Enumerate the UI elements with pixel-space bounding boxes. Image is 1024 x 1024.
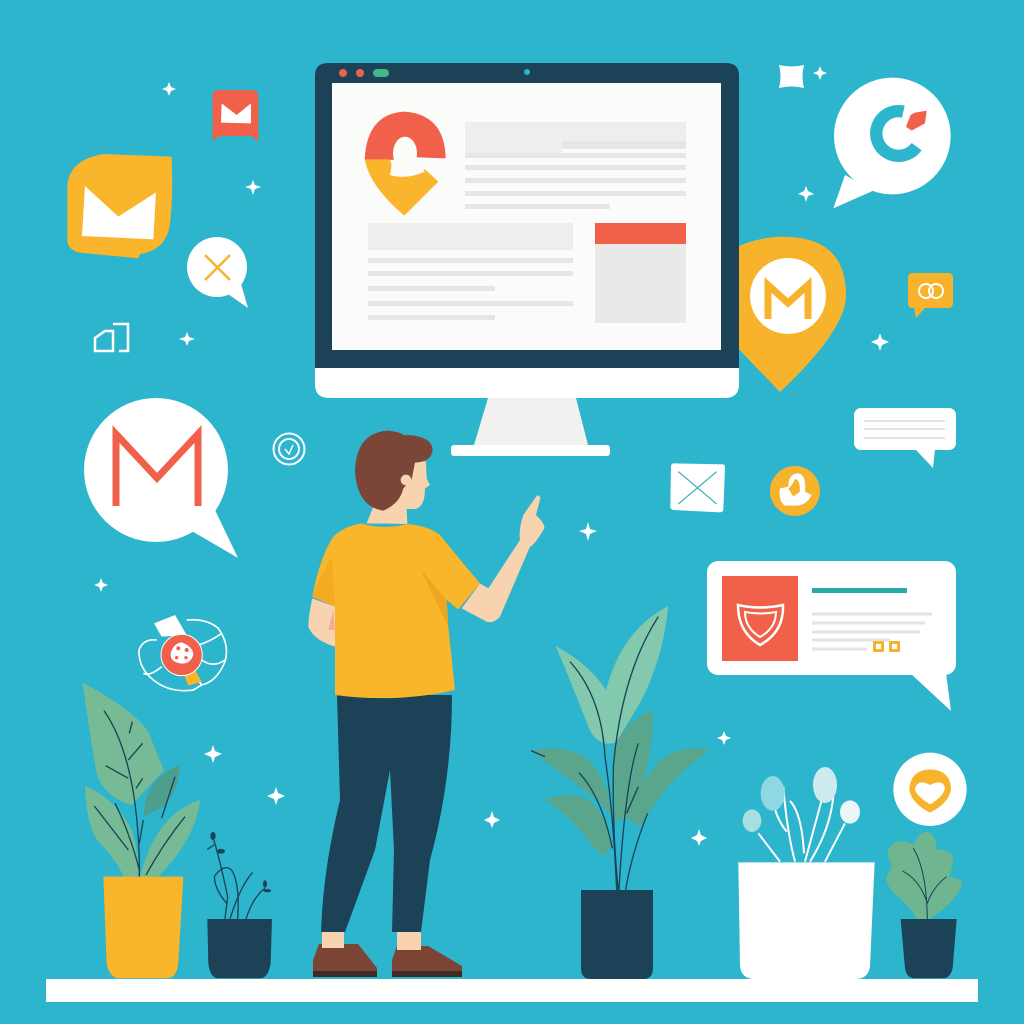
icon: profile pin — [365, 112, 446, 216]
icon: gmail bubble — [84, 398, 238, 558]
plant: centre — [531, 606, 710, 890]
shoes — [313, 944, 377, 977]
sparkles — [94, 66, 889, 846]
icon: small heart chat — [908, 273, 953, 318]
monitor — [315, 63, 739, 456]
trousers — [321, 695, 452, 932]
text lines — [368, 122, 686, 320]
torso, arms and head — [308, 431, 544, 698]
icon: x bubble — [187, 237, 248, 308]
icon: target — [274, 434, 304, 464]
icon: small outline glyph — [95, 324, 128, 351]
icon: C bubble — [833, 78, 951, 208]
person — [308, 431, 544, 977]
pot: centre — [581, 890, 653, 979]
side card — [595, 223, 686, 323]
plants: white pot, heart bubble, right green — [738, 753, 967, 979]
panel: security card — [707, 561, 956, 711]
icon: yellow and red mail — [67, 90, 258, 258]
ankles — [322, 928, 344, 948]
plants: left green in yellow pot and dark sprig — [83, 683, 272, 978]
icon: envelope and lock — [670, 463, 820, 516]
icon: top square sparkle — [779, 65, 804, 88]
icon: M pin — [730, 237, 846, 392]
icon: red badge — [139, 615, 226, 691]
floor shelf — [46, 979, 978, 1002]
icon: message bubble — [854, 408, 956, 468]
